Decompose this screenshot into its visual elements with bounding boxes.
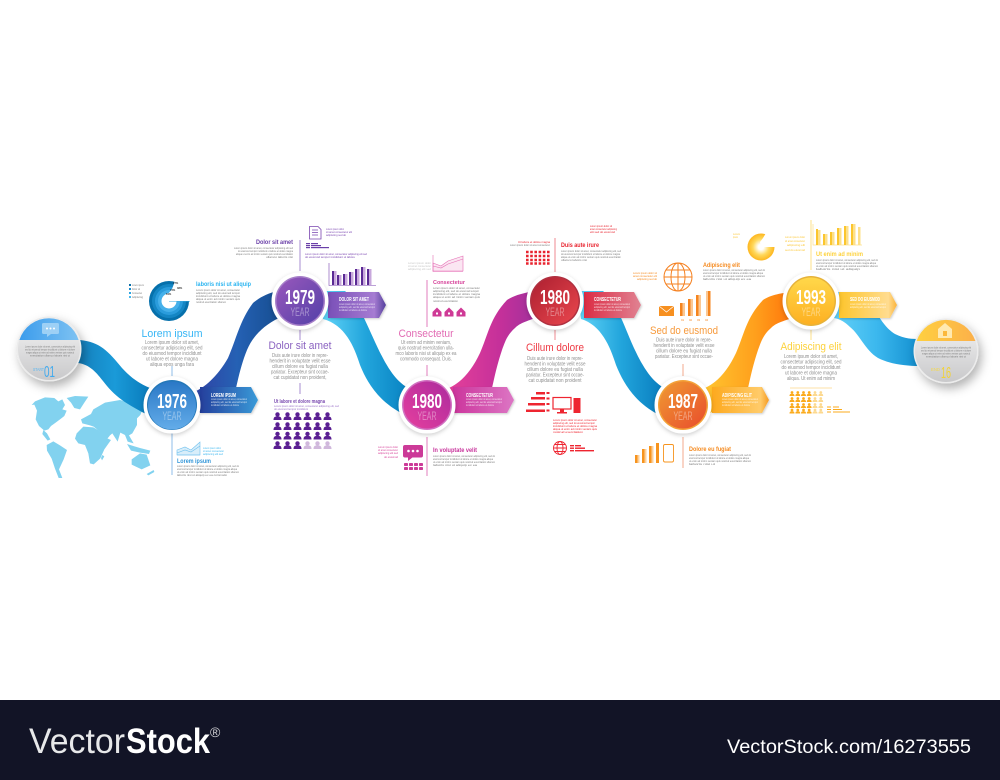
- block: lorem ipsum lower: laboris nisi ut aliquip ex ea commodo: [177, 474, 228, 477]
- flag: sed do eiusmod: SED DO EIUSMOD: [850, 297, 880, 303]
- flag: adipiscing elit: Lorem ipsum dolor sit amet, consectetur: [722, 398, 758, 401]
- block: dolor sit amet top: Dolor sit amet: [256, 240, 293, 246]
- block: computer: adipiscing elit, sed do eiusmod tempor: [553, 422, 595, 425]
- logo: ®: [210, 724, 221, 740]
- block: dolor sit amet top: [234, 226, 376, 286]
- block: pie laboris: 17%: [173, 281, 179, 285]
- flag: consectetur: incididunt ut labore et dolore: [466, 404, 495, 407]
- text block: sed do eusmod: Sed do eusmod: [650, 325, 718, 337]
- block: duis aute irure: Lorem ipsum dolor sit amet, consectetur adipiscing elit, sed: [561, 250, 622, 253]
- block: consectetur top: nostrud exercitation: [433, 300, 459, 303]
- legend: Lorem ipsum: [132, 284, 144, 287]
- ribbon: 1987 to 1993: [705, 292, 792, 414]
- block: ut enim ad minim: Lorem ipsum dolor sit amet, consectetur adipiscing elit, sed do: [816, 259, 879, 262]
- end circle: Lorem ipsum dolor sit amet, consectetur adipiscing elit: [921, 346, 971, 350]
- ribbon: start to 1976: [78, 340, 150, 414]
- block: lorem ipsum lower: Lorem ipsum dolor sit amet, consectetur adipiscing elit, sed do: [177, 465, 240, 468]
- bar chart: [680, 291, 710, 322]
- stacked bars: [526, 392, 550, 412]
- block: people grid purple: Ut labore et dolore magna: [274, 399, 325, 405]
- flag: adipiscing elit: incididunt ut labore et dolore: [722, 404, 751, 407]
- pie chart: [748, 232, 776, 260]
- url: VectorStock.com/16273555: [727, 737, 971, 758]
- icon: envelope: [659, 306, 674, 316]
- block: dolore eu fugiat: [635, 443, 752, 466]
- flag: consectetur: CONSECTETUR: [466, 393, 493, 399]
- block: duis aute irure: Ut labore et dolore magna: [518, 241, 551, 244]
- end circle: END: [931, 367, 941, 372]
- start circle: magna aliqua ut enim ad minim veniam quis nostrud: [26, 352, 75, 354]
- legend: Adipiscing: [132, 296, 144, 299]
- block: people grid purple: do eiusmod tempor incididunt: [274, 408, 308, 411]
- text block: cillum dolore: cat cupidatat non proident: [528, 378, 582, 384]
- block: ut enim ad minim: Ut enim ad minim: [816, 252, 863, 258]
- flag: consectetur red: CONSECTETUR: [594, 297, 621, 303]
- block: dolor sit amet top: Lorem ipsum dolor: [326, 228, 344, 231]
- block: duis aute irure: ullamco laboris nisi: [561, 259, 588, 262]
- block: in voluptate velit: eiusmod tempor incididunt ut labore et dolore magna aliqua: [433, 458, 494, 461]
- flag: sed do eiusmod: [839, 292, 897, 318]
- block: in voluptate velit: sit amet consectetur: [378, 449, 398, 452]
- world map: [32, 396, 154, 478]
- year circle 1987: YEAR: [674, 409, 693, 423]
- flag: adipiscing elit: adipiscing elit, sed do eiusmod tempor: [722, 401, 758, 404]
- block: computer: incididunt ut labore et dolore magna: [553, 425, 598, 428]
- icon: computer: [553, 398, 580, 414]
- flag: consectetur red: incididunt ut labore et dolore: [594, 309, 623, 312]
- text block: adipiscing elit: consectetur adipiscing elit, sed: [780, 360, 842, 366]
- block: adipiscing globe: ut enim ad minim veniam quis nostrud exercitation ullamco: [703, 275, 766, 278]
- end circle: 16: [941, 365, 951, 382]
- text block: consectetur: mco laboris nisi ut aliquip ex ea: [396, 351, 457, 357]
- year circle 1993: [782, 272, 840, 330]
- text block: adipiscing elit: do eiusmod tempor incididunt: [782, 365, 841, 371]
- pie chart: [149, 280, 192, 321]
- start circle: [16, 316, 82, 382]
- text block: cillum dolore: Cillum dolore: [526, 342, 584, 354]
- text block: dolor sit amet: cillum dolore eu fugiat nulla: [272, 364, 328, 370]
- text block: consectetur: [396, 328, 457, 362]
- ribbon: 1980 to 1980: [449, 292, 535, 414]
- flag: consectetur: [453, 387, 514, 413]
- start circle: exercitation ullamco laboris nisi ut: [30, 354, 70, 358]
- ribbon: 1976 to 1979: [194, 292, 279, 413]
- text block: cillum dolore: hendent in voluptate velit esse: [524, 362, 586, 368]
- flag: dolor sit amet: [328, 292, 386, 318]
- text block: lorem ipsum: Lorem ipsum dolor sit amet,: [145, 340, 199, 346]
- block: duis aute irure: Duis aute irure: [561, 243, 600, 249]
- block: computer: aliqua ut enim ad minim veniam quis: [553, 428, 598, 431]
- block: adipiscing globe: [633, 263, 766, 322]
- block: duis aute irure: aliqua ut enim ad minim veniam quis nostrud exercitation: [561, 256, 622, 259]
- block: consectetur top: [408, 255, 481, 316]
- block: duis aute irure: Lorem ipsum dolor sit: [590, 225, 612, 228]
- block: people grid purple: [274, 399, 340, 449]
- text block: sed do eusmod: pariatur. Excepteur sint occae-: [655, 354, 713, 360]
- year circle 1993: YEAR: [802, 305, 821, 319]
- block: lorem ipsum lower: eiusmod tempor incididunt ut labore et dolore magna aliqua: [177, 468, 238, 471]
- block: lorem ipsum lower: Lorem ipsum: [177, 459, 211, 465]
- bar chart: 01: [681, 318, 685, 322]
- flag: lorem ipsum: adipiscing elit, sed do eiusmod tempor: [211, 401, 247, 404]
- block: dolore eu fugiat: ut enim ad minim veniam quis nostrud exercitation ullamco: [689, 460, 752, 463]
- block: pie laboris: Lorem ipsum dolor sit amet, consectetur: [196, 289, 240, 292]
- block: lorem ipsum lower: sit amet consectetur: [203, 450, 224, 453]
- end circle: [914, 318, 978, 384]
- text block: sed do eusmod: [650, 325, 718, 360]
- text block: dolor sit amet: Dolor sit amet: [268, 340, 332, 352]
- block: dolor sit amet top: do eiusmod tempor incididunt ut labore et dolore magna: [238, 250, 294, 253]
- text block: adipiscing elit: [780, 341, 842, 382]
- block: pie laboris: aliqua ut enim ad minim veniam quis: [196, 298, 241, 301]
- text block: lorem ipsum: ut labore et dolore magna: [146, 356, 198, 362]
- block: duis aute irure: do eiusmod tempor incididunt ut labore et dolore magna: [561, 253, 621, 256]
- legend: Dolor sit: [132, 288, 140, 291]
- block: in voluptate velit: In voluptate velit: [433, 448, 477, 454]
- block: in voluptate velit: adipiscing elit sed: [378, 452, 399, 455]
- block: lorem ipsum lower: ut enim ad minim veniam quis nostrud exercitation ullamco: [177, 471, 240, 474]
- text block: dolor sit amet: pariatur. Excepteur sint occae-: [271, 370, 329, 376]
- block: dolor sit amet top: adipiscing sed do: [326, 234, 347, 237]
- bar chart: [635, 443, 659, 463]
- icon: speech bubble: [42, 323, 59, 337]
- block: consectetur top: adipiscing elit sed: [408, 268, 432, 271]
- text block: adipiscing elit: ut labore et dolore magna: [785, 370, 837, 376]
- year circle 1979: 1979: [285, 287, 315, 309]
- flag: dolor sit amet: DOLOR SIT AMET: [339, 297, 369, 303]
- block: duis aute irure: elit sed do eiusmod: [590, 231, 616, 234]
- block: adipiscing globe: Lorem ipsum dolor sit amet, consectetur adipiscing elit, sed do: [703, 269, 766, 272]
- block: computer: [526, 392, 598, 454]
- text block: dolor sit amet: Duis aute irure dolor in repre-: [272, 353, 328, 359]
- icon: chat bubble: [403, 445, 423, 470]
- block: ut enim ad minim: Lorem: [733, 233, 740, 236]
- block: ut enim ad minim: ipsum: [733, 236, 738, 239]
- text block: consectetur: commodo consequat. Duis.: [400, 356, 452, 362]
- block: pie laboris: 72%: [170, 288, 176, 292]
- block: ut enim ad minim: adipiscing elit: [787, 244, 805, 247]
- block: in voluptate velit: Lorem ipsum dolor sit amet, consectetur adipiscing elit, sed do: [433, 455, 496, 458]
- block: in voluptate velit: laboris nisi ut aliquip ex ea: [433, 464, 478, 467]
- flag: consectetur red: Lorem ipsum dolor sit amet, consectetur: [594, 303, 630, 306]
- block: pie laboris: 38%: [177, 286, 183, 290]
- block: computer: nostrud exercitation: [553, 431, 584, 434]
- connectors: [172, 220, 811, 476]
- end circle: sed do eiusmod tempor incididunt ut labore et dolore: [921, 350, 972, 352]
- block: dolor sit amet top: ullamco laboris nisi: [266, 256, 294, 259]
- end circle: exercitation ullamco laboris nisi ut: [926, 356, 966, 358]
- ribbon: 1993 to end: [834, 292, 920, 366]
- logo: Vector: [29, 722, 125, 761]
- flag: adipiscing elit: ADIPISCING ELIT: [722, 393, 752, 399]
- year circle 1976: [144, 376, 200, 434]
- year circle 1980 red: YEAR: [546, 305, 565, 319]
- block: pie laboris: incididunt ut labore et dolore magna: [196, 295, 241, 298]
- legend: [129, 284, 144, 299]
- block: consectetur top: adipiscing elit, sed do eiusmod tempor: [433, 290, 479, 293]
- block: pie laboris: adipiscing elit, sed do eiusmod tempor: [196, 292, 240, 295]
- ribbon: 1980 to 1987: [578, 291, 664, 415]
- text block: lorem ipsum: [142, 328, 203, 368]
- block: dolore eu fugiat: Dolore eu fugiat: [689, 447, 731, 453]
- block: adipiscing globe: amet consectetur elit: [633, 275, 657, 278]
- icon: globe: [664, 263, 692, 291]
- icons: houses: [432, 308, 466, 316]
- flag: dolor sit amet: Lorem ipsum dolor sit amet, consectetur: [339, 303, 375, 306]
- block: in voluptate velit: do eiusmod: [384, 456, 399, 459]
- text block: consectetur: Ut enim ad minim veniam,: [401, 340, 451, 346]
- flag: sed do eiusmod: Lorem ipsum dolor sit amet, consectetur: [850, 303, 886, 306]
- block: dolor sit amet top: do eiusmod tempor incididunt ut labore: [305, 256, 356, 259]
- icon: tablet: [664, 444, 674, 462]
- block: ut enim ad minim: [733, 224, 879, 271]
- text block: cillum dolore: [524, 342, 586, 384]
- block: in voluptate velit: [378, 445, 496, 470]
- block: pie laboris: nostrud exercitation ullamco: [196, 301, 227, 304]
- bar chart: [329, 263, 376, 286]
- block: duis aute irure: [510, 225, 622, 264]
- flag: sed do eiusmod: adipiscing elit, sed do eiusmod tempor: [850, 306, 886, 309]
- block: duis aute irure: amet consectetur adipiscing: [590, 228, 618, 231]
- footer band: [0, 700, 1000, 780]
- text block: sed do eusmod: henderit in voluptate velit esse: [654, 343, 715, 349]
- block: ut enim ad minim: sit amet consectetur: [785, 240, 805, 243]
- flag: consectetur red: [584, 292, 641, 318]
- end circle: magna aliqua ut enim ad minim veniam quis nostrud: [922, 352, 971, 356]
- logo: Stock: [126, 722, 210, 761]
- start circle: Lorem ipsum dolor sit amet, consectetur adipiscing elit: [25, 346, 75, 348]
- block: lorem ipsum lower: adipiscing elit sed: [203, 453, 224, 456]
- start circle: sed do eiusmod tempor incididunt ut labore et dolore: [25, 348, 76, 352]
- block: ut enim ad minim: ut enim ad minim veniam quis nostrud exercitation ullamco: [816, 265, 879, 268]
- text block: cillum dolore: pariatur. Excepteur sint occae-: [526, 372, 584, 378]
- area chart: [177, 442, 200, 455]
- text block: adipiscing elit: Adipiscing elit: [780, 341, 842, 353]
- flag: consectetur: Lorem ipsum dolor sit amet, consectetur: [466, 398, 502, 401]
- block: dolore eu fugiat: Lorem ipsum dolor sit amet, consectetur adipiscing elit, sed do: [689, 454, 752, 457]
- year circle 1979: YEAR: [290, 305, 310, 319]
- text block: consectetur: quis nostrud exercitation ulla-: [398, 346, 454, 352]
- block: ut enim ad minim: eiusmod tempor incididunt ut labore et dolore magna aliqua: [816, 262, 877, 265]
- year circle 1976: YEAR: [162, 409, 182, 423]
- text block: lorem ipsum: Lorem ipsum: [142, 328, 202, 340]
- block: lorem ipsum lower: [177, 442, 240, 477]
- text block: lorem ipsum: do eiusmod tempor incididunt: [142, 351, 202, 357]
- block: adipiscing globe: laboris nisi ut aliquip ex ea: [703, 278, 752, 281]
- year circle 1993: 1993: [796, 287, 826, 309]
- year circle 1980 red: 1980: [540, 287, 570, 309]
- flag: lorem ipsum: LOREM IPSUM: [211, 393, 236, 399]
- block: dolore eu fugiat: laboris nisi ut: [689, 463, 716, 466]
- legend: Consectet: [132, 292, 142, 295]
- bar chart: 03: [697, 318, 701, 322]
- year circle 1987: 1987: [668, 391, 698, 413]
- block: people grid purple: Lorem ipsum dolor sit amet, consectetur adipiscing elit, sed: [274, 405, 340, 408]
- text block: dolor sit amet: cat cupidatat non proident,: [274, 375, 326, 381]
- block: ut enim ad minim: laboris nisi ut aliquip: [816, 268, 861, 271]
- text block: adipiscing elit: aliqua. Ut enim ad minim: [787, 376, 835, 382]
- flag: dolor sit amet: adipiscing elit, sed do eiusmod tempor: [339, 306, 375, 309]
- block: dolor sit amet top: Lorem ipsum dolor sit amet, consectetur adipiscing elit sed: [234, 247, 294, 250]
- logo: [29, 722, 221, 761]
- bar chart: [813, 224, 862, 245]
- year circle 1979: [272, 272, 328, 330]
- block: in voluptate velit: Lorem ipsum dolor: [378, 446, 398, 449]
- icon: globe: [554, 442, 566, 454]
- block: consectetur top: Lorem ipsum dolor: [408, 262, 431, 265]
- block: adipiscing globe: Adipiscing elit: [703, 263, 740, 269]
- text block: adipiscing elit: Lorem ipsum dolor sit amet,: [784, 354, 838, 360]
- flag: consectetur: adipiscing elit, sed do eiusmod tempor: [466, 401, 502, 404]
- text block: dolor sit amet: [268, 340, 332, 381]
- block: pie laboris: laboris nisi ut aliquip: [196, 282, 251, 288]
- block: duis aute irure: Lorem ipsum dolor sit amet consectetur: [510, 244, 550, 247]
- flag: consectetur red: adipiscing elit, sed do eiusmod tempor: [594, 306, 630, 309]
- block: pie laboris: [129, 280, 251, 321]
- block: consectetur top: sit amet consectetur: [408, 265, 431, 268]
- block: adipiscing globe: eiusmod tempor incididunt ut labore et dolore magna aliqua: [703, 272, 764, 275]
- block: dolore eu fugiat: eiusmod tempor incididunt ut labore et dolore magna aliqua: [689, 457, 750, 460]
- start circle: START: [33, 367, 44, 372]
- block: lorem ipsum lower: Lorem ipsum dolor: [203, 447, 221, 450]
- year circle 1980 magenta: 1980: [412, 391, 442, 413]
- year circle 1976: 1976: [157, 391, 187, 413]
- icon: document: [310, 226, 321, 239]
- text block: lorem ipsum: aliqua epos unga fara: [150, 362, 194, 368]
- block: consectetur top: incididunt ut labore et dolore magna: [433, 293, 481, 296]
- area chart: [433, 255, 463, 272]
- year circle 1980 magenta: YEAR: [418, 409, 437, 423]
- flag: lorem ipsum: Lorem ipsum dolor sit amet, consectetur: [211, 398, 247, 401]
- text block: sed do eusmod: cillum dolore eu fugiat nulla: [656, 348, 712, 354]
- text block: dolor sit amet: henderit in voluptate velit esse: [270, 358, 331, 364]
- block: consectetur top: Lorem ipsum dolor sit amet, consectetur: [433, 287, 480, 290]
- flag: lorem ipsum: incididunt ut labore et dolore: [211, 404, 240, 407]
- block: adipiscing globe: adipiscing sed do: [637, 278, 658, 281]
- start circle: 01: [44, 364, 55, 381]
- block: ut enim ad minim: Lorem ipsum dolor: [785, 236, 805, 239]
- block: consectetur top: Consectetur: [433, 280, 466, 286]
- icon: house: [938, 323, 952, 338]
- bar chart: 04: [705, 318, 709, 322]
- flag: adipiscing elit: [712, 387, 769, 413]
- block: computer: Lorem ipsum dolor sit amet, consectetur: [553, 419, 597, 422]
- text block: lorem ipsum: consectetur adipiscing elit, sed: [142, 346, 203, 352]
- flag: lorem ipsum: [200, 387, 258, 413]
- block: consectetur top: aliqua ut enim ad minim veniam quis: [433, 296, 481, 299]
- year circle 1987: [654, 376, 712, 434]
- block: adipiscing globe: Lorem ipsum dolor sit: [633, 272, 657, 275]
- text block: consectetur: Consectetur: [398, 328, 454, 340]
- flag: dolor sit amet: incididunt ut labore et dolore: [339, 309, 368, 312]
- text block: sed do eusmod: Duis aute irure dolor in repre-: [656, 338, 712, 344]
- ribbon: 1979 to 1980: [320, 291, 408, 414]
- bar chart: 02: [689, 318, 693, 322]
- block: dolor sit amet top: aliqua ut enim ad minim veniam quis nostrud exercitation: [236, 253, 294, 256]
- block: ut enim ad minim: sed do eiusmod: [785, 249, 806, 252]
- year circle 1980 red: [526, 272, 584, 330]
- block: dolor sit amet top: sit amet consectetur elit: [326, 231, 352, 234]
- text block: cillum dolore: cillum dolore eu fugiat nulla: [527, 367, 583, 373]
- block: in voluptate velit: ut enim ad minim veniam quis nostrud exercitation ullamco: [433, 461, 496, 464]
- year circle 1980 magenta: [398, 376, 456, 434]
- block: pie laboris: 61%: [166, 292, 172, 296]
- icon grid: red people: [526, 252, 550, 264]
- text block: cillum dolore: Duis aute irure dolor in repre-: [527, 356, 583, 362]
- block: dolor sit amet top: Lorem ipsum dolor sit amet, consectetur adipiscing elit sed: [305, 253, 368, 256]
- block: people grid orange: [790, 388, 850, 414]
